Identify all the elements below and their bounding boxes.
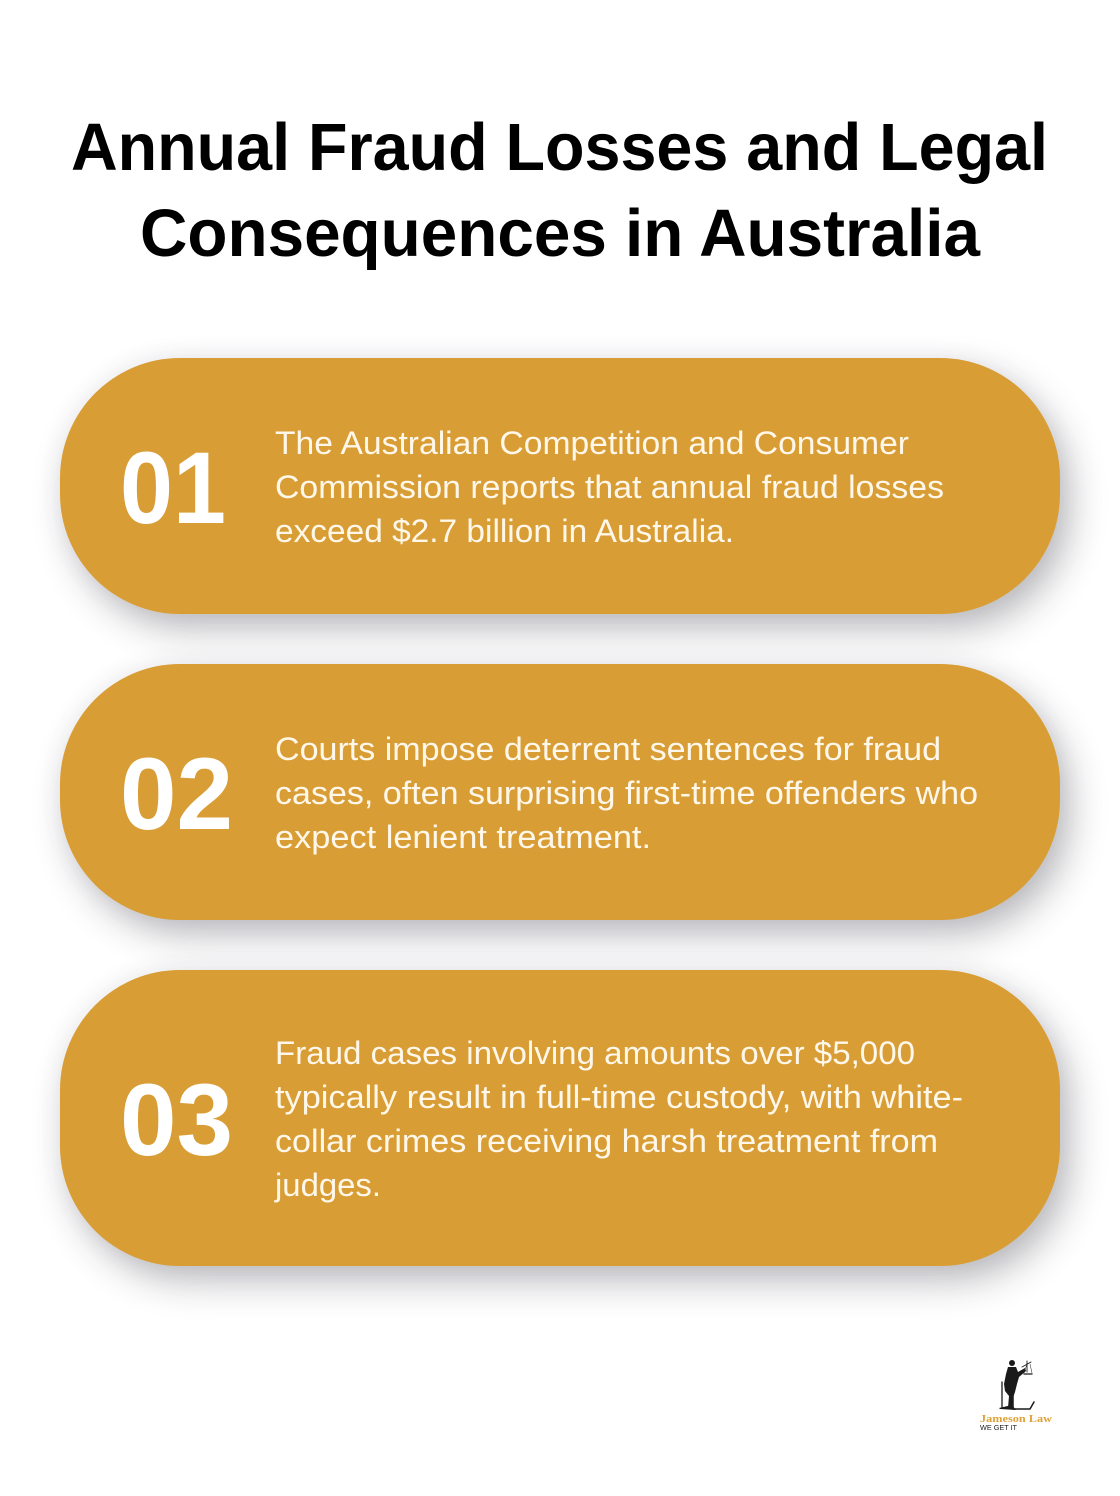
statistic 01 text: exceed $2.7 billion in Australia. (275, 513, 734, 549)
statistic 02 text: expect lenient treatment. (275, 819, 651, 855)
title (71, 110, 1048, 271)
statistic 01 text: The Australian Competition and Consumer (275, 425, 909, 461)
logo tagline: WE GET IT (980, 1425, 1018, 1432)
statistic 03 text: judges. (274, 1167, 381, 1203)
icon: lady justice with scales (999, 1360, 1034, 1410)
statistic 01 text: Commission reports that annual fraud losses (275, 469, 944, 505)
statistic 03 number: 03 (120, 1063, 233, 1177)
logo: Jameson Law (980, 1360, 1052, 1432)
statistic 01 text (275, 425, 944, 549)
statistic 03 text: collar crimes receiving harsh treatment from (275, 1123, 938, 1159)
statistic 03 text: Fraud cases involving amounts over $5,000 (275, 1035, 915, 1071)
statistic 03 text (274, 1035, 963, 1203)
panel: statistic 02 background (60, 664, 1060, 920)
panel: statistic 01 background (60, 358, 1060, 614)
statistic 02 text: Courts impose deterrent sentences for fraud (275, 731, 941, 767)
panel: statistic 03 background (60, 970, 1060, 1266)
title: Consequences in Australia (140, 196, 981, 271)
title: Annual Fraud Losses and Legal (71, 110, 1048, 185)
logo name: Jameson Law (980, 1414, 1052, 1425)
statistic 01 number: 01 (120, 431, 226, 545)
statistic 02 number: 02 (120, 737, 233, 851)
statistic 02 text (275, 731, 978, 855)
statistic 03 text: typically result in full-time custody, with white- (275, 1079, 963, 1115)
statistic 02 text: cases, often surprising first-time offenders who (275, 775, 978, 811)
